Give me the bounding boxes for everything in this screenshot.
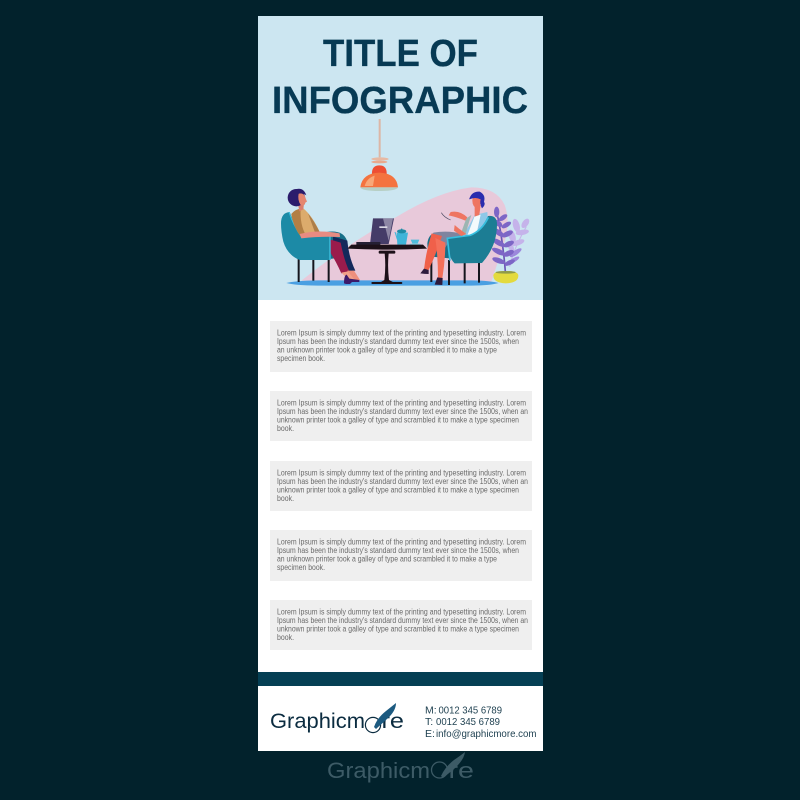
chair seat and back	[281, 212, 331, 260]
plant: light leaves	[506, 217, 531, 267]
text block 3: unknown printer took a galley of type and scrambled it to make a type specimen	[277, 485, 519, 494]
plant: dark leaves	[491, 207, 516, 272]
icon: pen nib	[374, 703, 396, 729]
footer logo: Graphicm	[270, 710, 365, 733]
contact details: E:	[425, 728, 435, 740]
title: TITLE OF	[323, 33, 478, 75]
head	[288, 189, 307, 206]
panel: poster	[258, 16, 543, 751]
watermark logo: Graphicm	[327, 758, 430, 783]
feet	[347, 271, 360, 282]
illustration: meeting scene	[281, 119, 531, 286]
text block 4: specimen book.	[277, 563, 325, 572]
text block 5	[270, 600, 532, 650]
footer logo	[270, 703, 404, 733]
contact details: info@graphicmore.com	[436, 728, 537, 740]
text block 2: book.	[277, 424, 294, 433]
text block 5: unknown printer took a galley of type and scrambled it to make a type specimen	[277, 624, 519, 633]
text block 5: Ipsum has been the industry's standard dummy text ever since the 1500s, when an	[277, 616, 528, 625]
text block 2: Lorem Ipsum is simply dummy text of the printing and typesetting industry. Lorem	[277, 398, 526, 408]
far leg	[333, 237, 355, 271]
text block 3: Ipsum has been the industry's standard dummy text ever since the 1500s, when an	[277, 477, 528, 486]
text block 4: an unknown printer took a galley of type and scrambled it to make a type	[277, 554, 497, 563]
floor	[286, 280, 499, 286]
plant pot	[493, 271, 518, 283]
panel: header background	[258, 16, 543, 300]
jacket and shirt	[464, 212, 488, 237]
laptop	[356, 218, 394, 245]
chair rear arm	[427, 233, 450, 258]
text block 1	[270, 321, 532, 372]
title: INFOGRAPHIC	[272, 80, 528, 122]
text block 5: Lorem Ipsum is simply dummy text of the printing and typesetting industry. Lorem	[277, 608, 526, 616]
neck	[475, 205, 481, 217]
arm	[300, 231, 340, 238]
table	[347, 245, 427, 284]
text block 1: Ipsum has been the industry's standard dummy text ever since the 1500s, when	[277, 337, 519, 346]
title	[272, 33, 528, 122]
left woman and chair	[281, 189, 360, 284]
jacket and blouse	[291, 208, 320, 237]
text block 5: book.	[277, 633, 294, 642]
text block 1: an unknown printer took a galley of type and scrambled it to make a type	[277, 345, 497, 354]
text block 1: Lorem Ipsum is simply dummy text of the printing and typesetting industry. Lorem	[277, 328, 526, 338]
head	[469, 192, 485, 208]
text block 4: Lorem Ipsum is simply dummy text of the printing and typesetting industry. Lorem	[277, 538, 526, 546]
right woman and chair	[420, 192, 497, 285]
text block 4	[270, 530, 532, 581]
contact details: 0012 345 6789	[438, 704, 502, 716]
footer divider band	[258, 672, 543, 686]
icon: pendant lamp	[360, 119, 398, 191]
arms	[461, 215, 471, 235]
footer logo: re	[382, 710, 404, 733]
skirt	[433, 232, 463, 251]
contact details: T:	[425, 716, 433, 728]
text block 1: specimen book.	[277, 354, 325, 363]
legs	[424, 233, 442, 270]
pink background blob	[301, 187, 508, 282]
text block 3: Lorem Ipsum is simply dummy text of the printing and typesetting industry. Lorem	[277, 468, 526, 478]
contact details: 0012 345 6789	[436, 716, 500, 728]
watermark logo: re	[448, 758, 474, 783]
neck	[298, 203, 304, 211]
watermark logo	[327, 752, 474, 783]
contact details: M:	[425, 704, 437, 716]
teapot and cup	[395, 228, 420, 245]
text block 4: Ipsum has been the industry's standard dummy text ever since the 1500s, when	[277, 546, 519, 555]
text block 2: Ipsum has been the industry's standard dummy text ever since the 1500s, when an	[277, 407, 528, 416]
near leg	[330, 239, 349, 273]
chair legs	[299, 258, 329, 282]
text block 2	[270, 391, 532, 441]
chair seat and back	[447, 216, 497, 263]
chair legs	[431, 255, 479, 285]
contact details	[425, 704, 537, 740]
shoes	[420, 269, 429, 274]
text block 2: unknown printer took a galley of type and scrambled it to make a type specimen	[277, 415, 519, 424]
icon: watermark pen nib	[441, 752, 465, 778]
chair rear arm	[326, 231, 347, 259]
gesture mark	[441, 213, 451, 220]
text block 3	[270, 461, 532, 511]
text block 3: book.	[277, 494, 294, 503]
